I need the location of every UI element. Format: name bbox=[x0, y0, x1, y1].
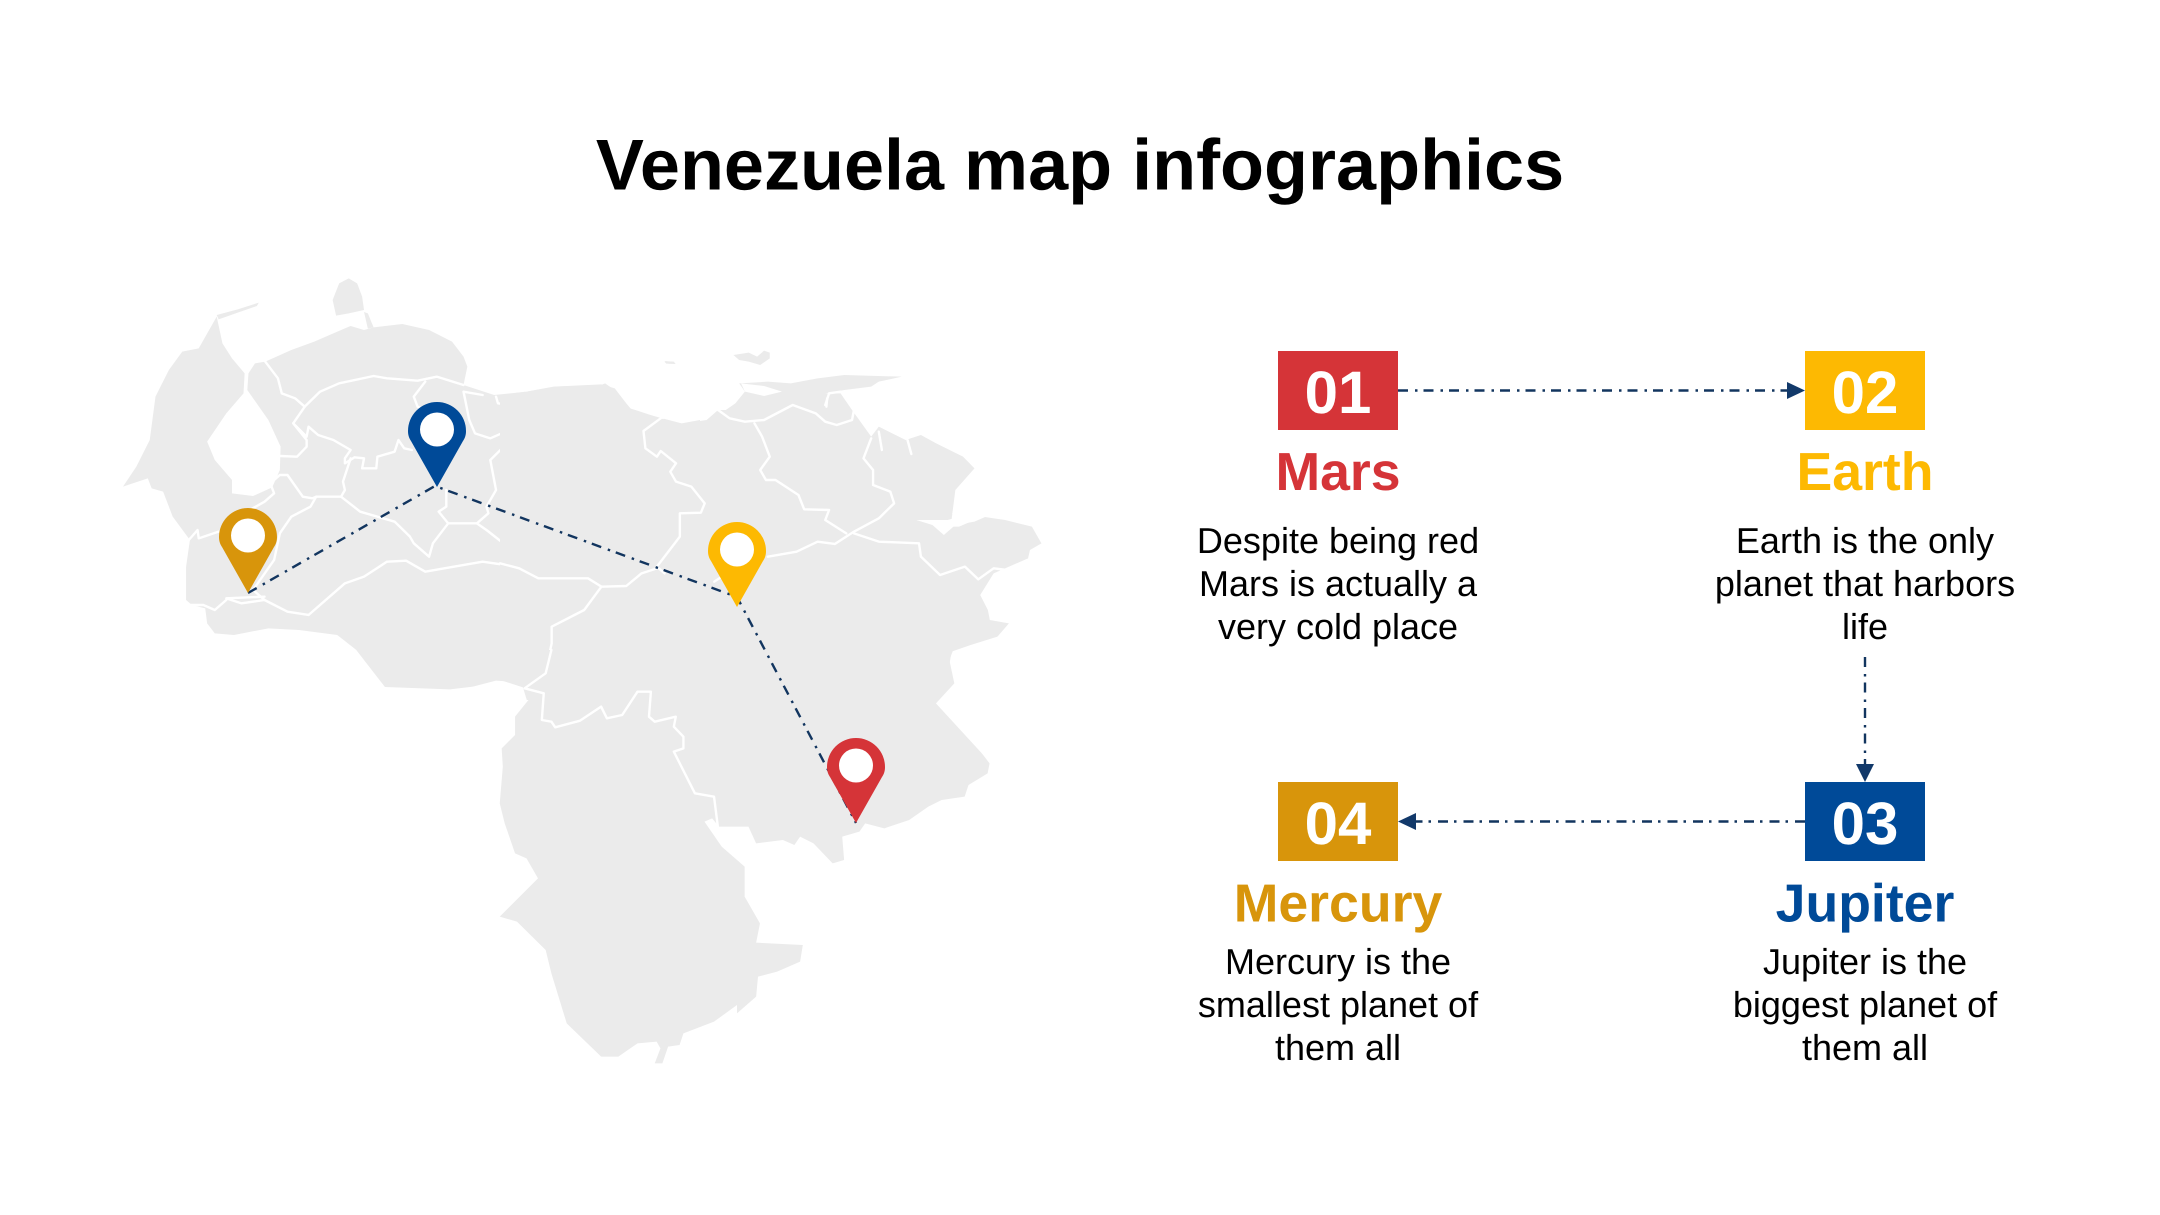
icon: gold pin bbox=[219, 508, 277, 593]
heading: Mars: Mars bbox=[1275, 442, 1401, 502]
arrow: 02 to 03 bbox=[1856, 657, 1874, 782]
text: Jupiter description bbox=[1733, 941, 1998, 1068]
text: Mars description: very cold place bbox=[1218, 606, 1458, 647]
heading: Mercury: Mercury bbox=[1234, 874, 1442, 934]
text: Mercury description bbox=[1198, 941, 1479, 1068]
arrow: 01 to 02 bbox=[1398, 382, 1805, 399]
text: Mercury description: Mercury is the bbox=[1225, 941, 1451, 982]
number badge 02 bbox=[1805, 351, 1925, 430]
icon: red pin bbox=[827, 738, 885, 823]
text: Mercury description: them all bbox=[1275, 1027, 1401, 1068]
panel: 03 Jupiter bbox=[1733, 782, 1998, 1068]
text: Jupiter description: biggest planet of bbox=[1733, 984, 1998, 1025]
number badge 02: 02 bbox=[1832, 359, 1898, 426]
number badge 01 bbox=[1278, 351, 1398, 430]
map of Venezuela bbox=[123, 278, 1041, 1063]
text: Mars description: Mars is actually a bbox=[1199, 563, 1478, 604]
panel: 04 Mercury bbox=[1198, 782, 1479, 1068]
number badge 04 bbox=[1278, 782, 1398, 861]
text: Earth description bbox=[1715, 520, 2015, 647]
text: Mercury description: smallest planet of bbox=[1198, 984, 1479, 1025]
text: Earth description: life bbox=[1842, 606, 1888, 647]
panel: 02 Earth bbox=[1715, 351, 2015, 647]
number badge 03 bbox=[1805, 782, 1925, 861]
number badge 01: 01 bbox=[1305, 359, 1371, 426]
arrow: 03 to 04 bbox=[1398, 813, 1805, 830]
title: Venezuela map infographics bbox=[596, 126, 1564, 206]
heading: Jupiter: Jupiter bbox=[1776, 874, 1954, 934]
text: Earth description: Earth is the only bbox=[1736, 520, 1994, 561]
route line between pins bbox=[248, 486, 856, 823]
text: Jupiter description: Jupiter is the bbox=[1763, 941, 1967, 982]
text: Mars description bbox=[1197, 520, 1479, 647]
number badge 04: 04 bbox=[1305, 790, 1372, 857]
panel: 01 Mars bbox=[1197, 351, 1479, 647]
number badge 03: 03 bbox=[1832, 790, 1898, 857]
text: Jupiter description: them all bbox=[1802, 1027, 1928, 1068]
icon: yellow pin bbox=[708, 522, 766, 607]
heading: Earth: Earth bbox=[1796, 442, 1934, 502]
icon: blue pin bbox=[408, 402, 466, 487]
text: Mars description: Despite being red bbox=[1197, 520, 1479, 561]
text: Earth description: planet that harbors bbox=[1715, 563, 2015, 604]
